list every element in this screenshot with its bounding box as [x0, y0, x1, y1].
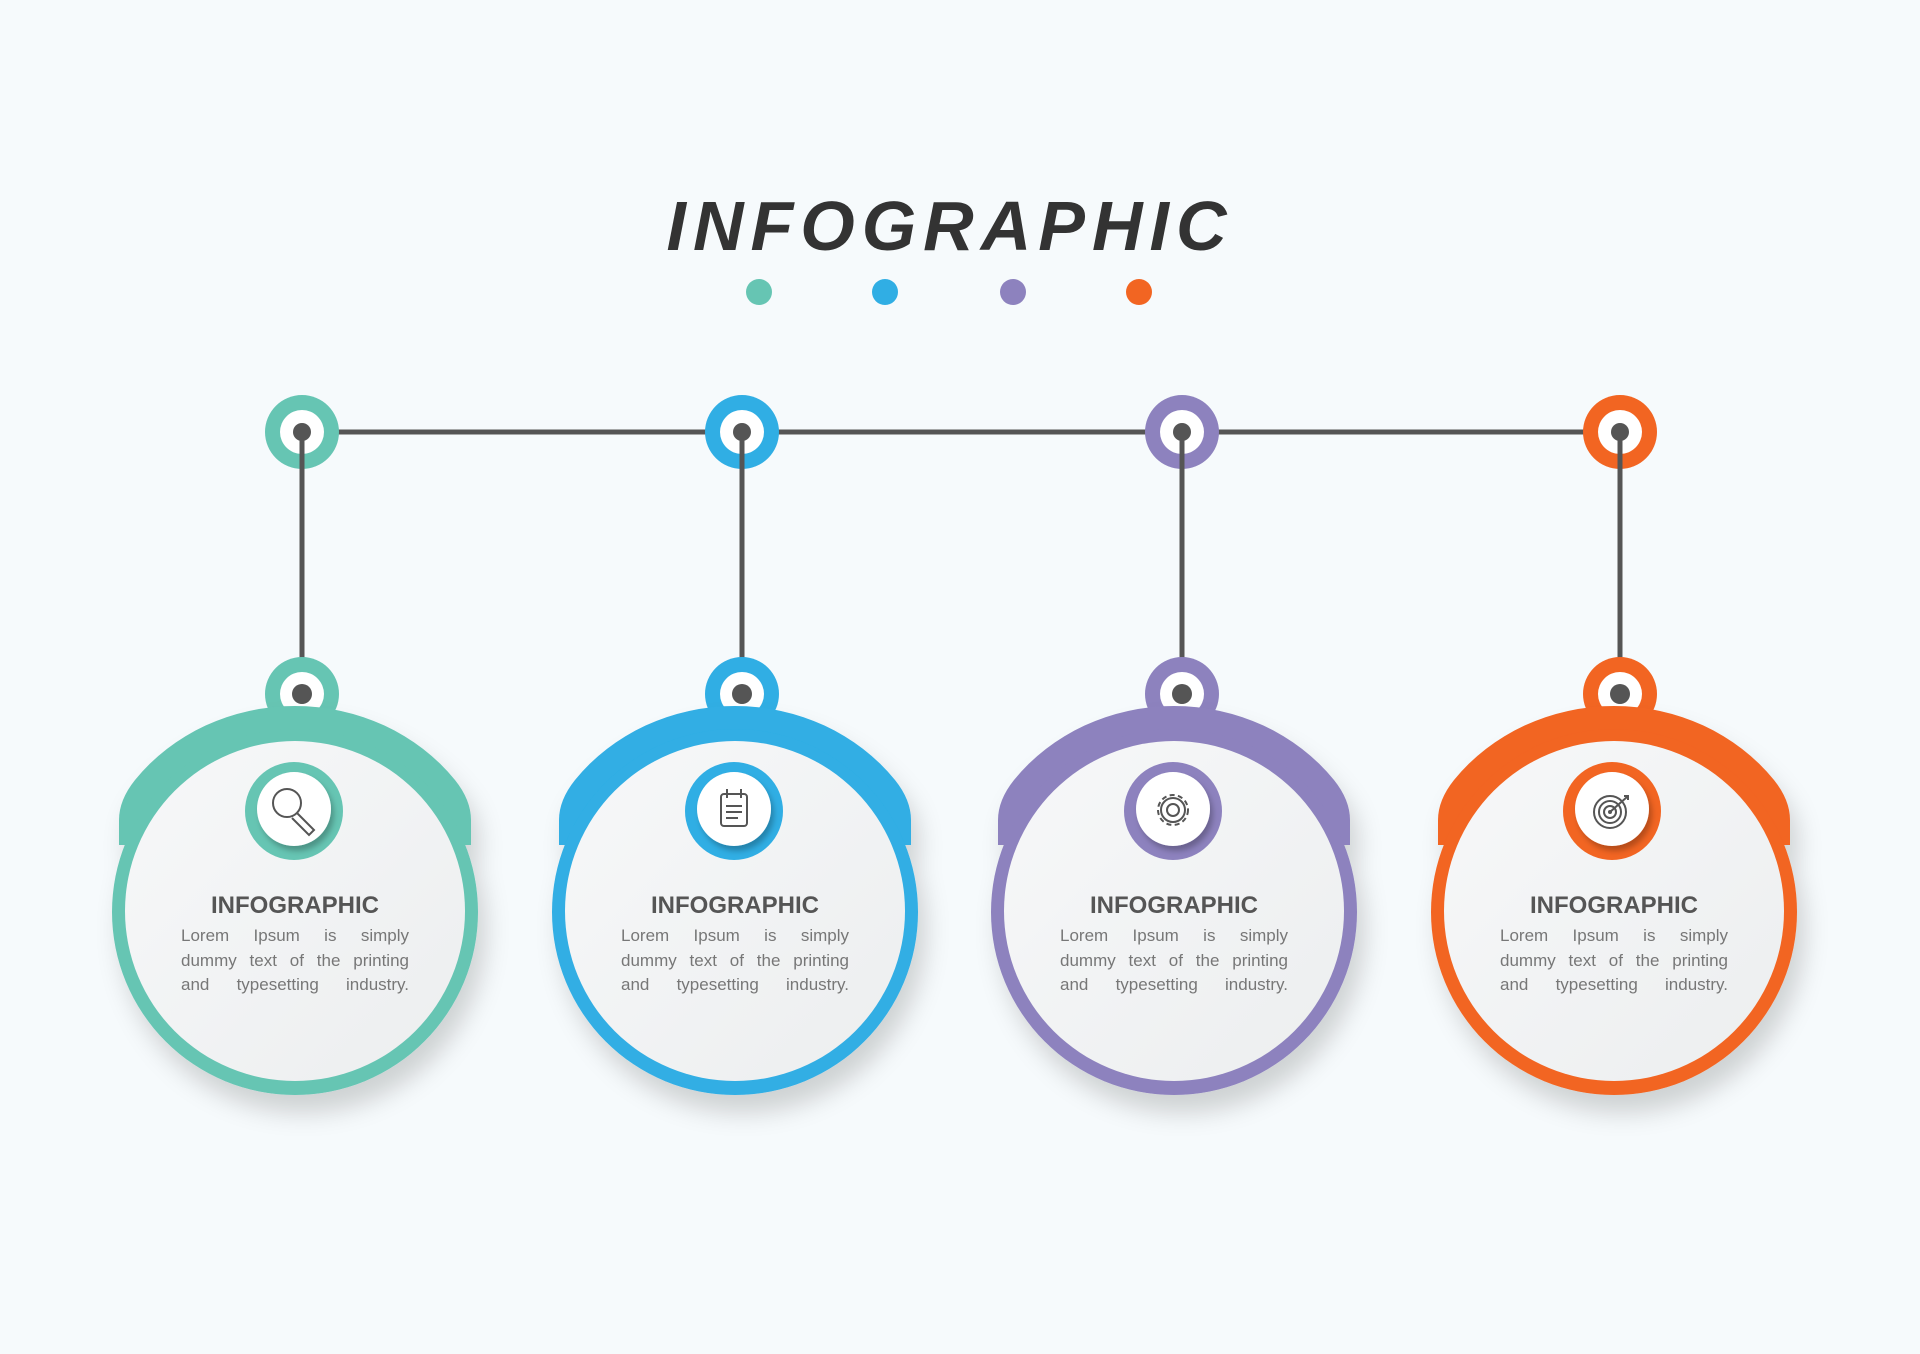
text: card 4: INFOGRAPHIC [1530, 892, 1698, 919]
text: card 4 [1500, 892, 1728, 994]
connector line [302, 430, 1620, 434]
text: card 2 [621, 892, 849, 994]
card 4 orange [1431, 395, 1797, 1095]
title: INFOGRAPHIC [666, 187, 1234, 265]
card 3 purple [991, 395, 1357, 1095]
text: card 2: Lorem Ipsum is simply dummy text of the printing and typesetting industry. [621, 926, 849, 994]
icon: gear [1124, 762, 1222, 860]
text: card 3: Lorem Ipsum is simply dummy text of the printing and typesetting industry. [1060, 926, 1288, 994]
text: card 1: INFOGRAPHIC [211, 892, 379, 919]
icon: target [1563, 762, 1661, 860]
card 2 blue [552, 395, 918, 1095]
icon: magnifier [245, 762, 343, 860]
icon: notepad [685, 762, 783, 860]
text: card 3: INFOGRAPHIC [1090, 892, 1258, 919]
card 1 teal [112, 395, 478, 1095]
header dots [746, 279, 1152, 305]
text: card 3 [1060, 892, 1288, 994]
text: card 1: Lorem Ipsum is simply dummy text of the printing and typesetting industry. [181, 926, 409, 994]
text: card 1 [181, 892, 409, 994]
text: card 4: Lorem Ipsum is simply dummy text of the printing and typesetting industry. [1500, 926, 1728, 994]
text: card 2: INFOGRAPHIC [651, 892, 819, 919]
